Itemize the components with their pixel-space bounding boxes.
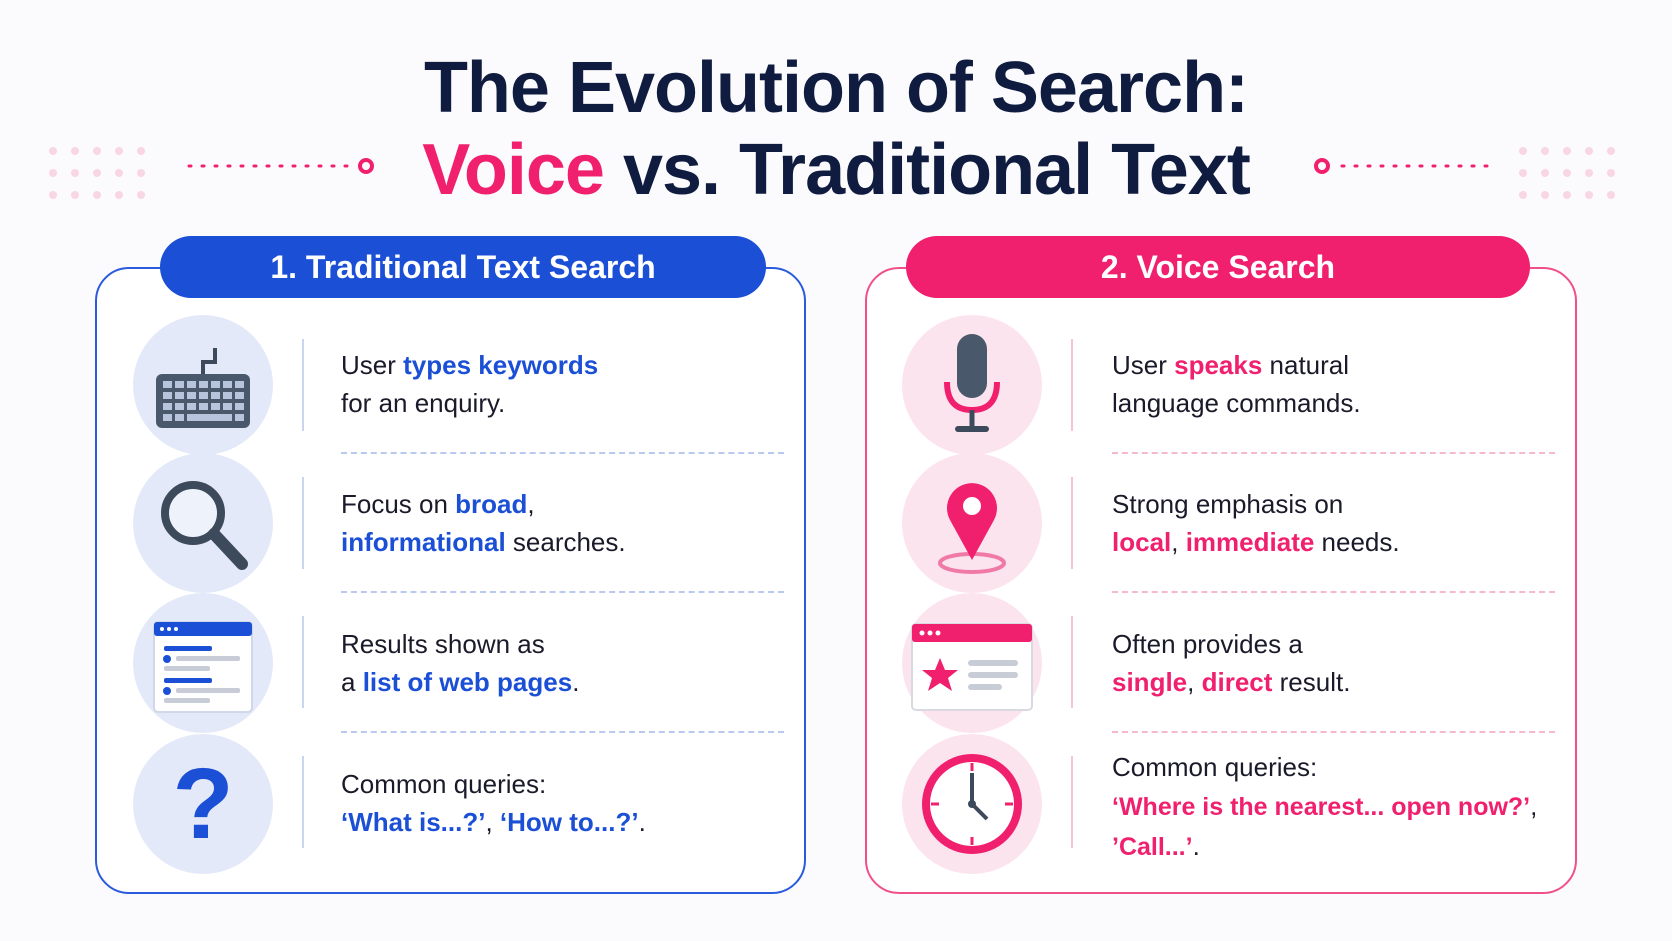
text: voice row 1	[1112, 350, 1361, 418]
pill heading: traditional	[160, 236, 766, 298]
text: voice row 4	[1112, 752, 1537, 861]
pill heading: voice: 2. Voice Search	[1101, 249, 1335, 285]
text: row 4: Common queries:	[341, 769, 546, 799]
text: voice row 3	[1112, 629, 1350, 697]
text: row 4: ‘What is...?’, ‘How to...?’.	[341, 807, 646, 837]
panel: traditional text search	[95, 267, 806, 894]
text: row 3	[341, 629, 579, 697]
text: row 4	[341, 769, 646, 837]
title: The Evolution of Search:	[424, 48, 1248, 128]
text: voice row 4: Common queries:	[1112, 752, 1317, 782]
text: row 3: a list of web pages.	[341, 667, 579, 697]
decoration: right dot grid	[1519, 147, 1615, 199]
title: Voice vs. Traditional Text	[422, 130, 1250, 210]
icon: keyboard	[133, 315, 273, 455]
text: row 2: Focus on broad,	[341, 489, 535, 519]
decoration: left dot grid	[49, 147, 145, 199]
icon: location pin	[902, 453, 1042, 593]
decoration: right dotted line	[1314, 158, 1488, 174]
text: voice row 2	[1112, 489, 1400, 557]
title	[422, 48, 1250, 210]
panel: voice search	[865, 267, 1577, 894]
text: voice row 2: local, immediate needs.	[1112, 527, 1400, 557]
icon: magnifier	[133, 453, 273, 593]
icon: microphone	[902, 315, 1042, 455]
text: voice row 2: Strong emphasis on	[1112, 489, 1343, 519]
decoration: left dotted line	[188, 158, 374, 174]
pill heading: traditional: 1. Traditional Text Search	[270, 249, 656, 285]
text: row 3: Results shown as	[341, 629, 545, 659]
icon: question mark	[133, 734, 273, 874]
text: row 1: User types keywords	[341, 350, 598, 380]
icon: results list	[133, 593, 273, 733]
pill heading: voice	[906, 236, 1530, 298]
text: row 2: informational searches.	[341, 527, 626, 557]
text: voice row 1: User speaks natural	[1112, 350, 1349, 380]
icon: clock	[902, 734, 1042, 874]
icon: single result window	[902, 593, 1042, 733]
text: voice row 4: ‘Where is the nearest... open now?’,	[1112, 791, 1537, 821]
text: voice row 3: single, direct result.	[1112, 667, 1350, 697]
icon: question mark: ?	[172, 748, 234, 860]
text: row 2	[341, 489, 626, 557]
text: row 1	[341, 350, 598, 418]
text: voice row 3: Often provides a	[1112, 629, 1303, 659]
text: voice row 1: language commands.	[1112, 388, 1361, 418]
text: row 1: for an enquiry.	[341, 388, 505, 418]
row 1 divider bar	[302, 339, 304, 431]
text: voice row 4: ’Call...’.	[1112, 831, 1200, 861]
